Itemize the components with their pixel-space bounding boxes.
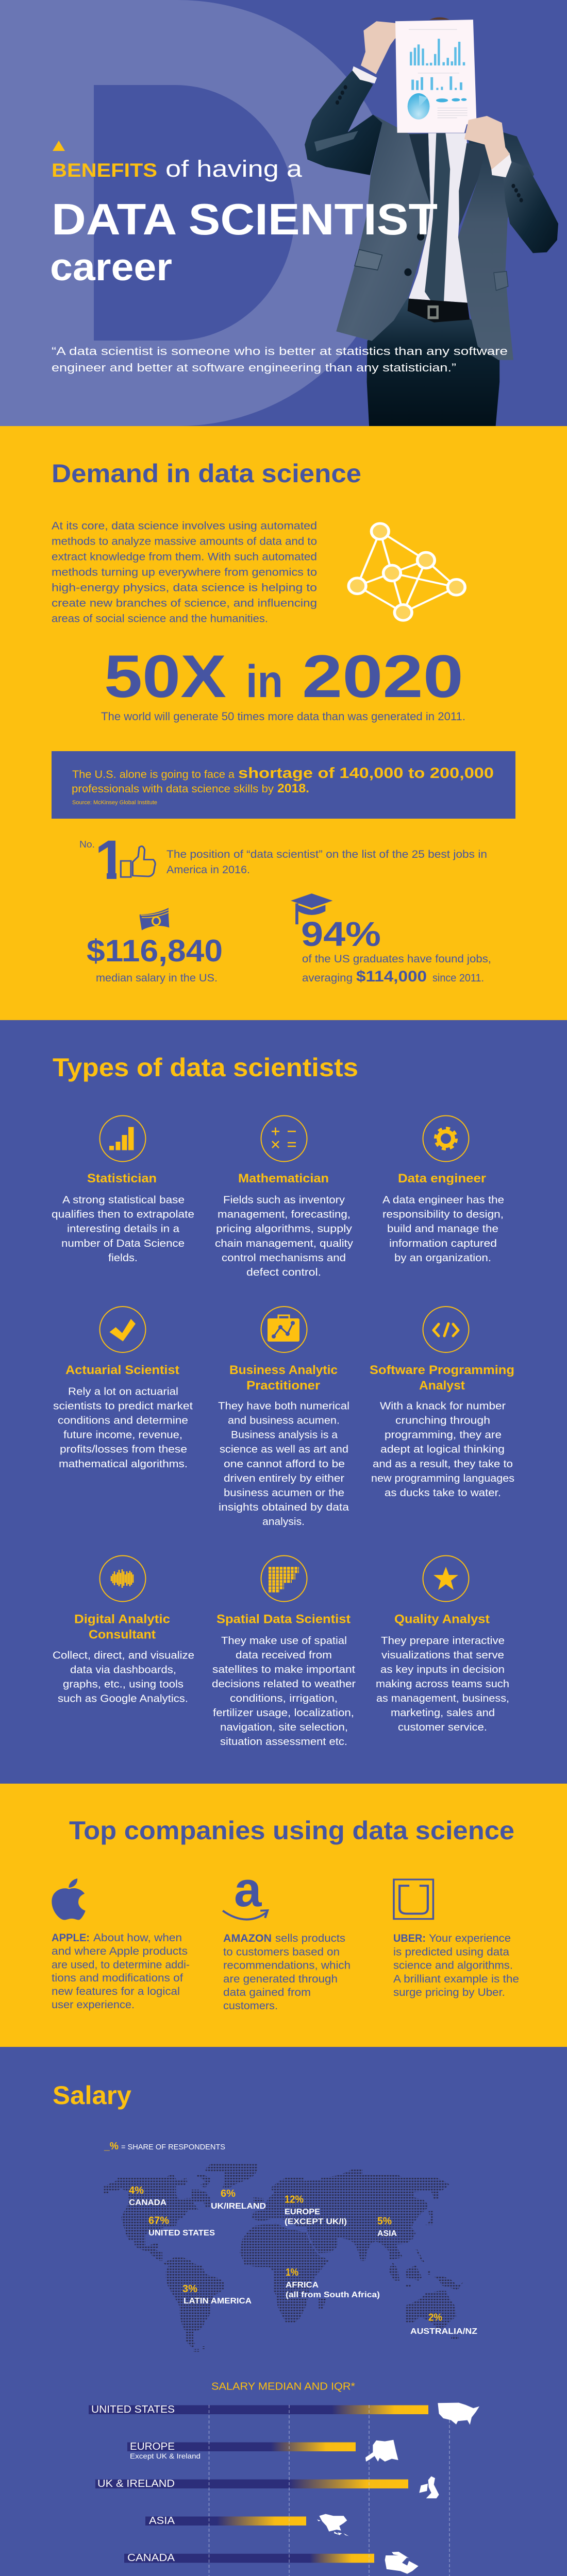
text: amazon: sells products	[275, 1933, 345, 1944]
text: apple: About how, when	[93, 1932, 182, 1944]
card: software programming analyst	[370, 1307, 514, 1499]
heading: Demand in data science	[52, 459, 361, 488]
stat: No. 1	[80, 841, 116, 879]
text: amazon: AMAZON	[223, 1933, 272, 1944]
text: uber: science and algorithms.	[393, 1960, 513, 1972]
card: quality analyst: marketing, sales and	[391, 1707, 495, 1719]
heading: Top companies using data science	[69, 1816, 514, 1845]
bar chart: salary range by region: Except UK & Ireland	[130, 2452, 201, 2460]
title: BENEFITS	[52, 160, 157, 181]
card: actuarial scientist: mathematical algorithms.	[59, 1458, 188, 1470]
card: quality analyst: They prepare interactive	[381, 1635, 505, 1647]
card: digital analytic consultant: data via dashboards,	[70, 1664, 176, 1676]
text: amazon	[223, 1933, 351, 2012]
icon: uber	[394, 1879, 433, 1919]
card: business analytic practitioner: Business analysis is a	[231, 1429, 338, 1441]
icon: amazon	[223, 1862, 268, 1920]
card: spatial data scientist: fertilizer usage, localization,	[213, 1707, 354, 1719]
card: data engineer: responsibility to design,	[382, 1209, 504, 1221]
card: mathematician: management, forecasting,	[218, 1209, 351, 1221]
bar chart: salary range by region: EUROPE	[130, 2441, 175, 2452]
card: quality analyst	[376, 1556, 509, 1733]
text: uber: surge pricing by Uber.	[393, 1987, 505, 1998]
text: amazon: to customers based on	[223, 1946, 340, 1958]
map labels: 12%	[285, 2194, 304, 2206]
icon: amazon: a	[234, 1862, 262, 1917]
card: mathematician: pricing algorithms, supply	[216, 1223, 353, 1235]
map labels	[129, 2185, 478, 2336]
card: digital analytic consultant: Consultant	[89, 1628, 156, 1642]
icon: thumbs up	[121, 846, 155, 877]
quote: engineer and better at software engineering than any statistician.”	[52, 361, 456, 374]
card: quality analyst: making across teams such	[376, 1678, 509, 1690]
card: data engineer: Data engineer	[398, 1172, 486, 1185]
card: actuarial scientist: scientists to predict market	[53, 1400, 193, 1412]
icon: money bill	[140, 908, 169, 930]
card: business analytic practitioner	[218, 1307, 349, 1528]
card: spatial data scientist	[212, 1556, 356, 1748]
card: data engineer	[382, 1116, 504, 1264]
text: uber: UBER:	[393, 1933, 426, 1944]
card: actuarial scientist: future income, revenue,	[63, 1429, 182, 1441]
intro paragraph: At its core, data science involves using automated	[52, 520, 317, 532]
icon: graduation cap	[291, 893, 332, 924]
text: apple: tions and modifications of	[52, 1972, 183, 1984]
panel: salary	[0, 2047, 567, 2576]
map labels: 2%	[428, 2312, 442, 2324]
map labels: 5%	[377, 2216, 392, 2227]
title: career	[50, 245, 172, 289]
card: statistician: Statistician	[87, 1172, 157, 1185]
panel: top companies	[0, 1784, 567, 2047]
map labels: LATIN AMERICA	[184, 2297, 252, 2306]
mini region maps	[292, 2403, 479, 2576]
intro paragraph: high-energy physics, data science is helping to	[52, 582, 317, 594]
card: business analytic practitioner: and business acumen.	[228, 1415, 340, 1426]
card: mathematician	[215, 1116, 354, 1278]
text: uber: Your experience	[429, 1933, 511, 1944]
card: software programming analyst: new programming languages	[371, 1472, 514, 1484]
text: position of data scientist: America in 2016.	[166, 864, 250, 876]
card: actuarial scientist	[53, 1307, 193, 1470]
title	[50, 156, 438, 289]
card: statistician: number of Data Science	[61, 1238, 185, 1249]
intro paragraph: methods to analyze massive amounts of data and to	[52, 536, 317, 547]
text: amazon: data gained from	[223, 1987, 311, 1998]
icon: apple	[52, 1878, 86, 1920]
card: spatial data scientist: decisions related to weather	[212, 1678, 356, 1690]
callout: shortage: Source: McKinsey Global Institute	[72, 800, 157, 806]
chart title: SALARY MEDIAN AND IQR*	[211, 2381, 355, 2393]
card: software programming analyst: adept at logical thinking	[380, 1444, 505, 1455]
map labels: (all from South Africa)	[286, 2291, 380, 2299]
card: data engineer: information captured	[389, 1238, 497, 1249]
dotted world map	[104, 2164, 463, 2352]
card: software programming analyst: programming, they are	[385, 1429, 502, 1441]
stat: 94 percent: since 2011.	[432, 972, 484, 984]
card: mathematician: chain management, quality	[215, 1238, 354, 1249]
text: amazon: customers.	[223, 2000, 278, 2012]
card: mathematician: Mathematician	[238, 1172, 329, 1185]
card: digital analytic consultant: Collect, direct, and visualize	[53, 1650, 194, 1661]
card: data engineer: by an organization.	[394, 1252, 491, 1264]
stat: No. 1: 1	[95, 828, 126, 891]
panel: hero	[0, 0, 567, 426]
stat caption: The world will generate 50 times more data than was generated in 2011.	[101, 710, 465, 723]
map labels: ASIA	[377, 2229, 397, 2238]
icon: network graph	[348, 523, 465, 620]
text: amazon: are generated through	[223, 1973, 338, 1985]
card: business analytic practitioner: Business Analytic	[229, 1363, 338, 1377]
text: position of data scientist: The position of “data scientist” on the list of the 25 best jobs in	[166, 849, 487, 860]
card: business analytic practitioner: business acumen or the	[224, 1487, 344, 1499]
card: software programming analyst: Analyst	[419, 1379, 465, 1393]
map labels: (EXCEPT UK/I)	[285, 2217, 347, 2226]
title: of having a	[165, 156, 303, 182]
text: apple: new features for a logical	[52, 1986, 180, 1997]
callout: shortage: professionals with data science skills by	[72, 783, 274, 795]
stat: 94 percent: averaging	[302, 972, 353, 984]
card: software programming analyst: crunching through	[395, 1415, 490, 1426]
photo: man in suit holding a report	[305, 18, 558, 426]
card: actuarial scientist: profits/losses from these	[60, 1444, 187, 1455]
card: spatial data scientist: data received from	[236, 1649, 332, 1661]
map labels: AFRICA	[286, 2281, 319, 2290]
text: apple	[52, 1932, 190, 2011]
panel: demand in data science	[0, 426, 567, 1020]
map labels: 67%	[148, 2215, 169, 2227]
text: apple: APPLE:	[52, 1932, 90, 1944]
bar chart: salary range by region: UK & IRELAND	[97, 2478, 175, 2489]
card: software programming analyst: as ducks take to water.	[385, 1487, 501, 1499]
card: spatial data scientist: Spatial Data Scientist	[216, 1613, 351, 1626]
stat: 94 percent: of the US graduates have found jobs,	[302, 953, 491, 965]
stat: 94 percent	[301, 915, 491, 985]
map labels: 4%	[129, 2185, 144, 2196]
text: amazon: recommendations, which	[223, 1960, 351, 1972]
stat: No. 1: No.	[79, 839, 95, 850]
map labels: 6%	[221, 2188, 236, 2199]
card: spatial data scientist: situation assessment etc.	[220, 1736, 347, 1748]
card: spatial data scientist: conditions, irrigation,	[230, 1692, 338, 1704]
card: software programming analyst: Software Programming	[370, 1363, 514, 1377]
card: business analytic practitioner: They have both numerical	[218, 1400, 349, 1412]
card: quality analyst: visualizations that serve	[381, 1649, 504, 1661]
card: digital analytic consultant: graphs, etc., using tools	[63, 1679, 184, 1690]
card: actuarial scientist: conditions and determine	[58, 1415, 188, 1426]
card: mathematician: defect control.	[246, 1266, 321, 1278]
stat: median salary	[87, 934, 223, 984]
card: mathematician: Fields such as inventory	[223, 1194, 345, 1206]
big letter D backdrop	[0, 0, 397, 426]
big stat: 50X in 2020	[104, 642, 463, 710]
card: statistician: fields.	[108, 1252, 138, 1264]
heading: Types of data scientists	[53, 1053, 358, 1082]
text: apple: are used, to determine addi-	[52, 1959, 190, 1971]
card: actuarial scientist: Rely a lot on actuarial	[68, 1385, 178, 1397]
card: quality analyst: customer service.	[398, 1721, 487, 1733]
card: actuarial scientist: Actuarial Scientist	[65, 1363, 179, 1377]
stat: 94 percent: $114,000	[356, 968, 427, 985]
map labels: UK/IRELAND	[211, 2202, 266, 2211]
card: mathematician: control mechanisms and	[222, 1252, 346, 1264]
card: software programming analyst: With a knack for number	[380, 1400, 506, 1412]
card: business analytic practitioner: science as well as art and	[220, 1444, 348, 1455]
big stat: 50X in 2020: 2020	[302, 642, 463, 710]
bar chart: salary range by region: CANADA	[127, 2552, 175, 2564]
card: statistician: qualifies then to extrapolate	[52, 1209, 194, 1221]
big stat: 50X in 2020: in	[246, 655, 283, 707]
text: uber	[393, 1933, 519, 1998]
card: statistician: A strong statistical base	[62, 1194, 185, 1206]
bar chart: salary range by region: ASIA	[149, 2515, 175, 2527]
intro paragraph	[52, 520, 317, 624]
map labels: 1%	[286, 2267, 298, 2278]
map labels: CANADA	[129, 2198, 166, 2207]
callout: shortage: shortage of 140,000 to 200,000	[238, 765, 494, 782]
card: quality analyst: as key inputs in decision	[380, 1664, 505, 1675]
map labels: AUSTRALIA/NZ	[410, 2327, 478, 2336]
legend: share of respondents: = SHARE OF RESPONDENTS	[121, 2143, 225, 2151]
legend: share of respondents: _%	[104, 2141, 119, 2152]
text: position of data scientist	[166, 849, 487, 876]
heading: Salary	[53, 2081, 131, 2110]
intro paragraph: create new branches of science, and influencing	[52, 597, 317, 609]
intro paragraph: extract knowledge from them. With such automated	[52, 551, 317, 563]
panel: types of data scientists	[0, 1020, 567, 1784]
map labels: EUROPE	[285, 2208, 320, 2216]
big stat: 50X in 2020: 50X	[104, 642, 226, 710]
text: uber: is predicted using data	[393, 1946, 509, 1958]
card: quality analyst: Quality Analyst	[394, 1613, 490, 1626]
legend: share of respondents	[104, 2141, 225, 2152]
bar chart: salary range by region	[80, 2404, 449, 2576]
card: business analytic practitioner: insights obtained by data	[219, 1501, 349, 1513]
intro paragraph: areas of social science and the humanities.	[52, 613, 268, 624]
quote: “A data scientist is someone who is better at statistics than any software	[52, 345, 508, 358]
card: data engineer: build and manage the	[387, 1223, 498, 1235]
card: spatial data scientist: navigation, site selection,	[220, 1721, 348, 1733]
card: business analytic practitioner: driven entirely by either	[224, 1472, 344, 1484]
quote	[52, 345, 508, 374]
bar chart: salary range by region: UNITED STATES	[91, 2404, 175, 2415]
stat: median salary: median salary in the US.	[96, 972, 218, 984]
callout: shortage: 2018.	[277, 782, 309, 795]
stat: median salary: $116,840	[87, 934, 223, 968]
callout: shortage	[52, 751, 515, 819]
card: data engineer: A data engineer has the	[382, 1194, 504, 1206]
map labels: UNITED STATES	[148, 2229, 215, 2238]
card: spatial data scientist: They make use of spatial	[221, 1635, 347, 1647]
card: statistician: interesting details in a	[67, 1223, 180, 1235]
card: statistician	[52, 1116, 194, 1264]
card: digital analytic consultant	[53, 1556, 194, 1705]
map labels: 3%	[182, 2283, 197, 2295]
arrow marker: triangle	[53, 141, 65, 151]
card: software programming analyst: and as a result, they take to	[373, 1458, 513, 1470]
card: digital analytic consultant: such as Google Analytics.	[58, 1693, 188, 1705]
card: spatial data scientist: satellites to make important	[212, 1664, 355, 1675]
text: uber: A brilliant example is the	[393, 1973, 519, 1985]
stat: 94 percent: 94%	[301, 915, 381, 954]
text: apple: user experience.	[52, 1999, 135, 2011]
card: quality analyst: as management, business,	[376, 1692, 509, 1704]
card: business analytic practitioner: one cannot afford to be	[224, 1458, 345, 1470]
card: business analytic practitioner: analysis.	[262, 1516, 305, 1528]
intro paragraph: methods turning up everywhere from genomics to	[52, 567, 317, 578]
callout: shortage: The U.S. alone is going to face a	[72, 769, 235, 781]
text: apple: and where Apple products	[52, 1945, 188, 1957]
card: business analytic practitioner: Practitioner	[246, 1379, 320, 1393]
card: digital analytic consultant: Digital Analytic	[74, 1613, 170, 1626]
title: DATA SCIENTIST	[52, 195, 438, 244]
